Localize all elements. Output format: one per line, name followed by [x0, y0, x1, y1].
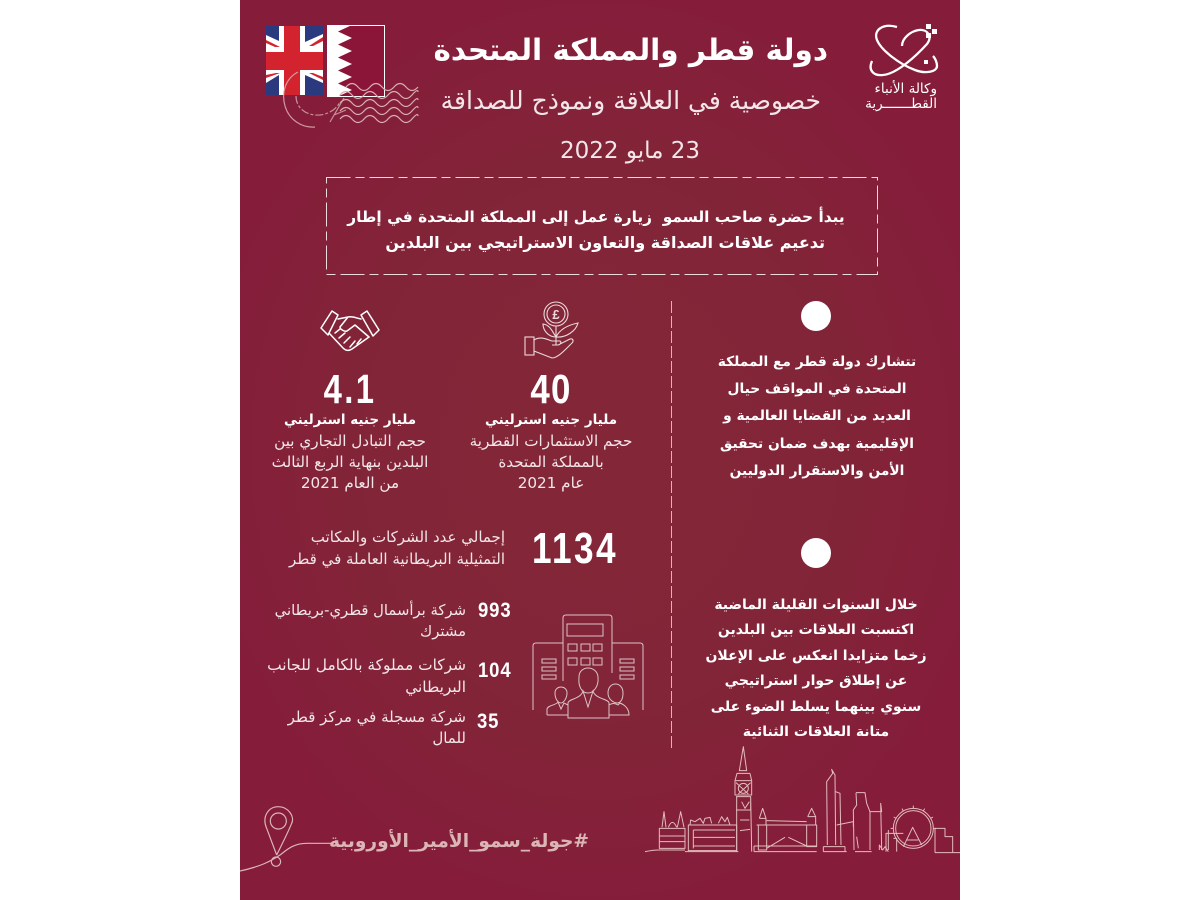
icon: map pin with line: [240, 806, 331, 872]
bullet: second: [801, 538, 831, 568]
description: عام 2021: [518, 474, 584, 492]
bullet: first: [801, 301, 831, 331]
text block: strategic dialogue: اكتسبت العلاقات بين البلدين: [718, 622, 914, 638]
value 993: 993: [478, 599, 511, 622]
text block: strategic dialogue: [705, 597, 927, 740]
description: البلدين بنهاية الربع الثالث: [272, 453, 428, 471]
skyline: London: [644, 746, 960, 854]
total companies description: [288, 528, 505, 568]
title: دولة قطر والمملكة المتحدة: [433, 33, 828, 67]
text block: shared positions: العديد من القضايا العالمية و: [723, 408, 911, 424]
text block: shared positions: المتحدة في المواقف حيال: [728, 381, 906, 397]
logo: Qatar News Agency: [865, 24, 938, 112]
unit: مليار جنيه استرليني: [485, 412, 617, 428]
company row: 993: مشترك: [420, 623, 466, 640]
description: من العام 2021: [301, 474, 399, 492]
company row: 993: [275, 600, 466, 640]
icon: handshake: [320, 310, 380, 352]
total companies value: 1134: [532, 524, 618, 573]
intro dashed box: [326, 177, 878, 275]
icon: Qatar flag: [327, 25, 385, 97]
intro dashed box: تدعيم علاقات الصداقة والتعاون الاستراتيجي بين البلدين: [385, 233, 825, 252]
intro text: يبدأ حضرة صاحب السمو زيارة عمل إلى المملكة المتحدة في إطار: [347, 208, 845, 226]
total companies description: إجمالي عدد الشركات والمكاتب: [311, 528, 505, 546]
text block: shared positions: الأمن والاستقرار الدوليين: [730, 463, 904, 479]
company row: 35: شركة مسجلة في مركز قطر: [288, 708, 466, 726]
icon: UK flag: [266, 26, 323, 95]
icon: money plant in hand: [524, 302, 579, 358]
text block: shared positions: تتشارك دولة قطر مع المملكة: [718, 354, 916, 370]
text block: strategic dialogue: سنوي بينهما يسلط الضوء على: [711, 699, 921, 715]
hashtag: #جولة_سمو_الأمير_الأوروبية: [329, 831, 589, 852]
description: حجم الاستثمارات القطرية: [470, 432, 632, 450]
value: 40: [530, 366, 572, 412]
text block: strategic dialogue: متانة العلاقات الثنائية: [743, 724, 889, 740]
infographic panel: [240, 0, 960, 900]
stat: 4.1 billion: [272, 366, 428, 492]
text block: shared positions: [718, 354, 916, 479]
value 104: 104: [478, 659, 511, 682]
logo: Qatar News Agency: وكالة الأنباء: [875, 81, 937, 97]
icon: money plant in hand: £: [552, 307, 560, 322]
company row: 104: [267, 656, 466, 696]
logo: Qatar News Agency: القطـــــــرية: [865, 96, 937, 112]
description: [470, 432, 632, 492]
icon: office buildings and people: [532, 614, 644, 718]
company row: 104: شركات مملوكة بالكامل للجانب: [267, 656, 466, 674]
stat: 40 billion: [470, 366, 632, 492]
total companies description: التمثيلية البريطانية العاملة في قطر: [289, 550, 505, 568]
icon: postmark stamp: [283, 72, 419, 128]
subtitle: خصوصية في العلاقة ونموذج للصداقة: [441, 86, 821, 115]
text block: strategic dialogue: عن إطلاق حوار استراتيجي: [725, 673, 907, 689]
vertical divider: [671, 301, 672, 749]
company row: 35: [287, 708, 466, 747]
value 35: 35: [477, 710, 499, 733]
text block: shared positions: الإقليمية بهدف ضمان تحقيق: [720, 436, 914, 452]
text block: strategic dialogue: خلال السنوات القليلة الماضية: [714, 597, 918, 613]
company row: 35: للمال: [432, 729, 466, 747]
intro text: [346, 206, 845, 252]
description: بالمملكة المتحدة: [498, 453, 604, 471]
unit: مليار جنيه استرليني: [284, 412, 416, 428]
date: 23 مايو 2022: [560, 138, 700, 164]
company row: 104: البريطاني: [405, 678, 466, 696]
text block: strategic dialogue: زخما متزايدا انعكس على الإعلان: [705, 648, 927, 664]
description: حجم التبادل التجاري بين: [274, 432, 426, 450]
company row: 993: شركة برأسمال قطري-بريطاني: [275, 602, 466, 619]
description: [272, 432, 428, 492]
value: 4.1: [324, 366, 376, 412]
